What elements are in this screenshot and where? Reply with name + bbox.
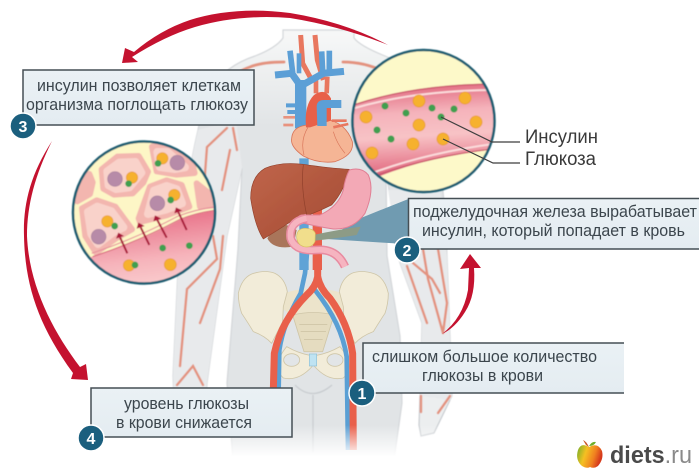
liver bbox=[251, 164, 349, 239]
bottom fade bbox=[160, 425, 460, 457]
badge 2 bbox=[394, 237, 420, 263]
box 3: организма поглощать глюкозу bbox=[26, 96, 249, 114]
pancreas bbox=[297, 228, 315, 247]
callout wedge bbox=[327, 198, 410, 247]
label: insulin: Инсулин bbox=[525, 127, 598, 148]
box 4 bbox=[91, 388, 292, 437]
box 4: в крови снижается bbox=[116, 414, 252, 432]
insulin dots bbox=[374, 102, 458, 142]
right arm light area bbox=[388, 190, 452, 433]
logo text: diets.ru bbox=[610, 442, 692, 469]
box 4: уровень глюкозы bbox=[124, 395, 249, 413]
pancreas tail bbox=[313, 227, 361, 241]
icon: apple logo bbox=[577, 440, 602, 468]
left arm light area bbox=[173, 120, 242, 400]
uptake arrows bbox=[116, 207, 187, 253]
glucose bbox=[102, 153, 180, 271]
right hand bbox=[419, 396, 450, 436]
cells bbox=[72, 146, 217, 253]
arrow: left, from box 3 to box 4 bbox=[24, 141, 88, 380]
arteries above the heart bbox=[301, 35, 327, 93]
pubic symphysis bbox=[309, 354, 317, 366]
badge 2: 2 bbox=[403, 243, 412, 260]
veins bbox=[279, 250, 348, 450]
box 2: поджелудочная железа вырабатывает bbox=[413, 203, 697, 221]
vena cava and branches bbox=[275, 51, 344, 270]
badge 4: 4 bbox=[87, 431, 96, 448]
glucose dots bbox=[360, 92, 482, 159]
badge 1: 1 bbox=[358, 386, 367, 403]
aorta under the liver bbox=[303, 207, 331, 270]
badge 1 bbox=[349, 380, 375, 406]
leader lines bbox=[441, 117, 520, 163]
magnifier: cells bbox=[72, 142, 223, 293]
arrow: top, from vessel to box 3 bbox=[122, 11, 388, 63]
human body silhouette bbox=[173, 30, 452, 460]
gallbladder bbox=[267, 225, 297, 247]
box 1: слишком большое количество bbox=[372, 348, 597, 366]
badge 3: 3 bbox=[19, 119, 28, 136]
stomach and duodenum bbox=[298, 169, 371, 229]
leg divide bbox=[312, 395, 314, 452]
box 3 bbox=[23, 70, 254, 125]
vessel bbox=[353, 84, 494, 176]
label: glucose: Глюкоза bbox=[525, 149, 596, 170]
pelvis bones bbox=[238, 271, 388, 379]
badge 4 bbox=[78, 425, 104, 451]
heart bbox=[283, 92, 353, 162]
box 2 bbox=[408, 198, 699, 249]
badge 3 bbox=[10, 113, 36, 139]
central organs bbox=[251, 35, 410, 270]
insulin bbox=[111, 160, 193, 268]
arteries bbox=[273, 250, 353, 450]
box 1 bbox=[363, 343, 624, 393]
box 2: инсулин, который попадает в кровь bbox=[422, 222, 685, 240]
magnifier: blood vessel bbox=[345, 50, 500, 192]
arm arteries bbox=[177, 62, 450, 413]
arrow: right, from box 1 to box 2 bbox=[442, 254, 481, 334]
vessel bbox=[90, 210, 214, 283]
box 3: инсулин позволяет клеткам bbox=[37, 77, 241, 95]
nuclei bbox=[91, 155, 185, 244]
pelvis and blood vessels bbox=[238, 250, 388, 450]
box 1: глюкозы в крови bbox=[422, 367, 543, 385]
